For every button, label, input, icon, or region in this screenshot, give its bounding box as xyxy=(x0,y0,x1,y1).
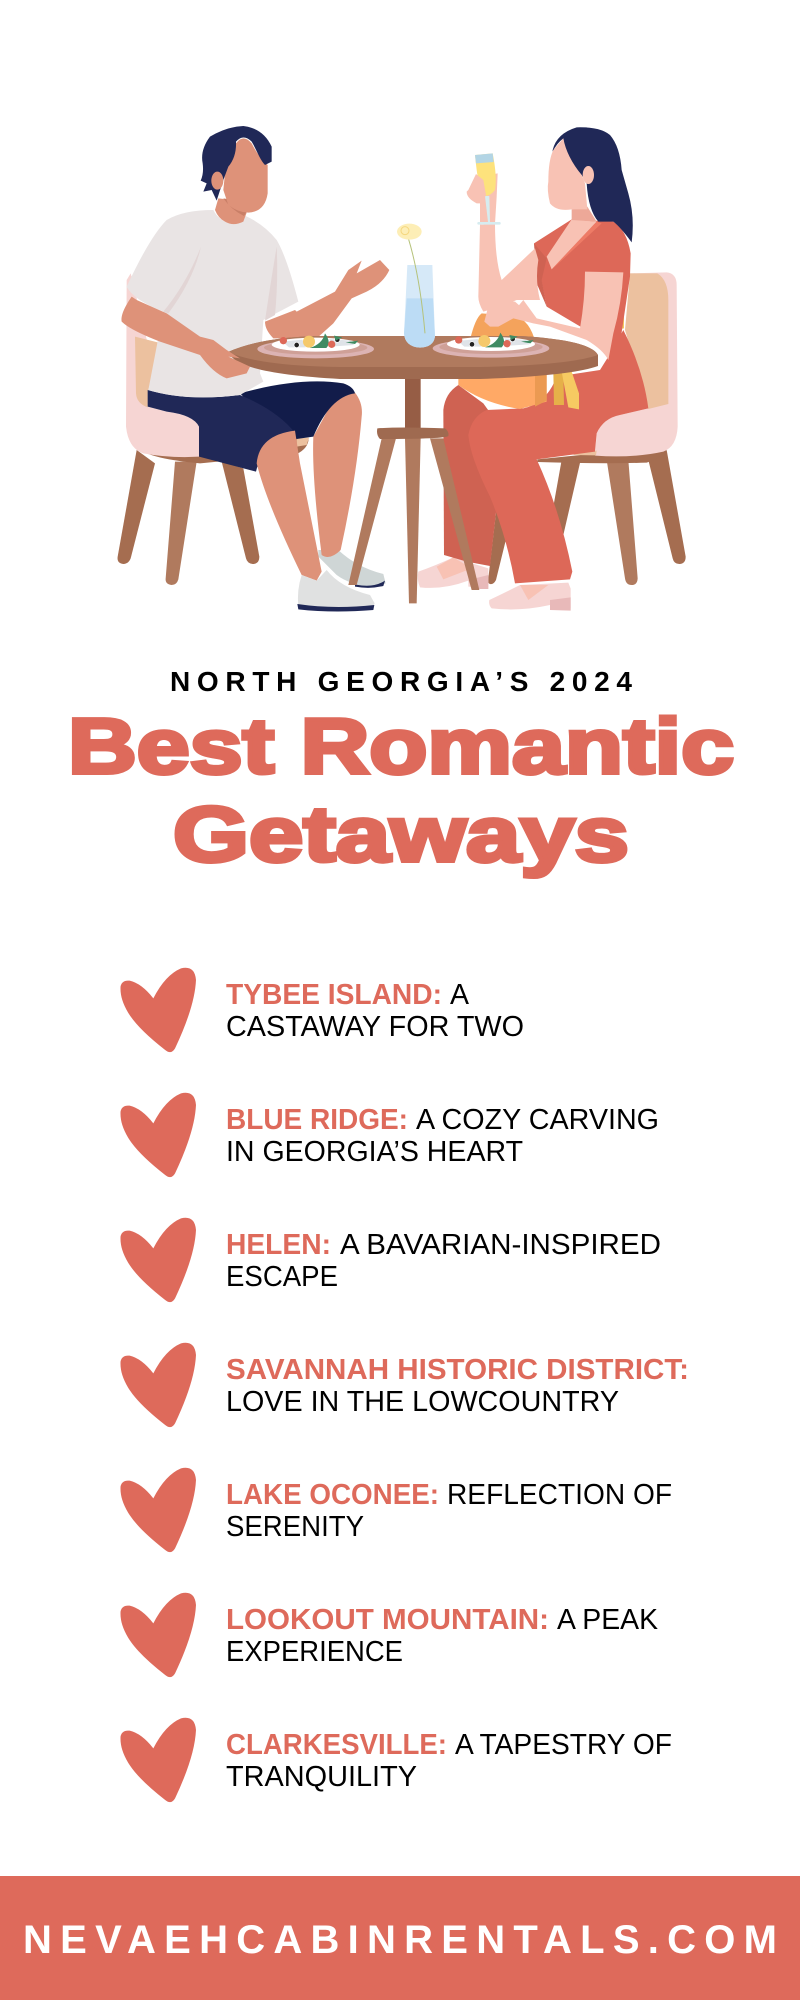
plate with salad: man xyxy=(257,333,374,358)
icon: heart xyxy=(120,1343,196,1427)
woman figure: bag top, dress, arms, head, glass xyxy=(467,127,633,360)
text: line one end: A BAVARIAN-INSPIRED xyxy=(340,1229,661,1261)
man figure: torso, far arm, head xyxy=(127,126,389,397)
footer band xyxy=(0,1876,800,2000)
man figure: legs, shorts, shoes xyxy=(148,381,386,612)
text: line one end: A TAPESTRY OF xyxy=(455,1729,672,1761)
vase with flower xyxy=(397,224,435,348)
table base and stool ring xyxy=(348,377,479,603)
text: line one end: A PEAK xyxy=(557,1604,659,1636)
label: Helen bold: HELEN: xyxy=(226,1229,331,1261)
list item: Tybee Island xyxy=(120,968,524,1052)
title: Best Romantic: Best Romantic xyxy=(68,702,734,790)
icon: heart xyxy=(120,1218,196,1302)
list item: Clarkesville xyxy=(120,1718,672,1802)
left chair xyxy=(118,273,309,585)
title: subtitle line: NORTH GEORGIA’S 2024 xyxy=(170,666,632,697)
icon: heart xyxy=(120,1468,196,1552)
text: line two: TRANQUILITY xyxy=(226,1761,417,1793)
label: Lookout Mountain bold: LOOKOUT MOUNTAIN: xyxy=(226,1604,549,1636)
title: Getaways: Getaways xyxy=(173,790,629,878)
text: line one end: REFLECTION OF xyxy=(447,1479,672,1511)
label: Savannah Historic District bold: SAVANNAH HISTORIC DISTRICT: xyxy=(226,1354,689,1386)
footer website text: NEVAEHCABINRENTALS.COM xyxy=(23,1918,777,1962)
label: Clarkesville bold: CLARKESVILLE: xyxy=(226,1729,447,1761)
text: line one end: A COZY CARVING xyxy=(416,1104,659,1136)
text: line two: LOVE IN THE LOWCOUNTRY xyxy=(226,1386,619,1418)
list item: Blue Ridge xyxy=(120,1093,659,1177)
label: Tybee Island bold: TYBEE ISLAND: xyxy=(226,979,442,1011)
plate with salad: woman xyxy=(433,333,549,358)
text: line two: CASTAWAY FOR TWO xyxy=(226,1011,524,1043)
list item: Savannah Historic District xyxy=(120,1343,689,1427)
text: line two: SERENITY xyxy=(226,1511,364,1543)
icon: heart xyxy=(120,1718,196,1802)
text: line one end: A xyxy=(450,979,470,1011)
woman figure: trousers, shoes, bag xyxy=(418,330,648,611)
label: Lake Oconee bold: LAKE OCONEE: xyxy=(226,1479,439,1511)
list item: Lookout Mountain xyxy=(120,1593,659,1677)
table top xyxy=(228,336,598,379)
right chair xyxy=(488,272,686,585)
icon: heart xyxy=(120,1593,196,1677)
text: line two: IN GEORGIA’S HEART xyxy=(226,1136,523,1168)
text: line two: EXPERIENCE xyxy=(226,1636,403,1668)
list item: Lake Oconee xyxy=(120,1468,672,1552)
icon: heart xyxy=(120,968,196,1052)
icon: heart xyxy=(120,1093,196,1177)
man near arm and hand on table xyxy=(121,297,250,378)
text: line two: ESCAPE xyxy=(226,1261,338,1293)
label: Blue Ridge bold: BLUE RIDGE: xyxy=(226,1104,408,1136)
illustration: couple at a restaurant table xyxy=(118,126,686,612)
list item: Helen xyxy=(120,1218,661,1302)
